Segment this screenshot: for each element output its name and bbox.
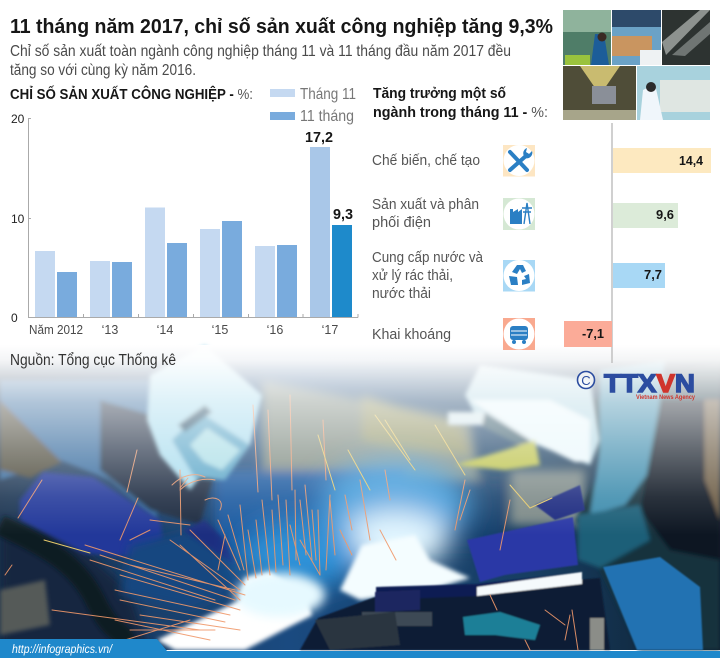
row: Chế biến, chế tạo: Chế biến, chế tạo xyxy=(372,152,480,169)
row: Khai khoáng: Khai khoáng xyxy=(372,326,451,343)
bar chart xyxy=(11,112,358,337)
lower left dark xyxy=(0,520,150,650)
source: Nguồn: Tổng cục Thống kê xyxy=(10,352,176,369)
white top fade xyxy=(0,345,720,535)
x axis labels: Năm 2012 xyxy=(29,323,83,337)
footer band xyxy=(0,639,720,658)
sector chart heading xyxy=(373,85,548,121)
row: Cung cấp nước và xử lý rác thải, nước thải: Cung cấp nước và xyxy=(372,249,484,266)
row: Sản xuất và phân phối điện: Sản xuất và phân xyxy=(372,196,479,213)
row: Cung cấp nước và xử lý rác thải, nước thải: 7,7 xyxy=(644,267,662,282)
icon: recycle xyxy=(503,260,535,292)
y axis labels: 20 xyxy=(11,112,25,126)
logo: TTXVN: Vietnam News Agency xyxy=(636,394,695,401)
sector axis line xyxy=(611,123,613,363)
photo: welders and sparks xyxy=(0,345,720,650)
bars: 11 tháng xyxy=(57,221,352,317)
hose xyxy=(0,525,125,642)
subtitle: Chỉ số sản xuất toàn ngành công nghiệp tháng 11 và 11 tháng đầu năm 2017 đều xyxy=(10,43,511,60)
row: Cung cấp nước và xử lý rác thải, nước thải xyxy=(372,249,665,302)
right sleeve cloth xyxy=(603,557,703,650)
x axis labels xyxy=(29,323,338,337)
y axis labels: 0 xyxy=(11,311,18,325)
left glove xyxy=(20,472,163,557)
icon: tools xyxy=(503,145,535,176)
row: Chế biến, chế tạo xyxy=(372,145,711,176)
value labels xyxy=(305,129,353,223)
value labels: 9,3 xyxy=(333,206,353,223)
lower machinery xyxy=(300,572,610,650)
right helmet xyxy=(448,365,600,470)
icon: mining cart xyxy=(503,318,535,350)
row: Chế biến, chế tạo: 14,4 xyxy=(679,153,704,168)
machinery backdrop xyxy=(215,380,585,560)
logo: TTXVN: C xyxy=(581,373,591,388)
blue smoke xyxy=(240,460,470,590)
row: Sản xuất và phân phối điện: phối điện xyxy=(372,214,431,231)
sector chart heading: Tăng trưởng một số xyxy=(373,85,506,102)
x axis labels: ‘13 xyxy=(102,323,118,337)
left helmet xyxy=(147,345,262,490)
sparks xyxy=(5,395,578,650)
right glove xyxy=(467,517,578,582)
row: Sản xuất và phân phối điện: 9,6 xyxy=(656,207,674,222)
logo: TTXVN: TTXVN xyxy=(604,370,695,398)
title: 11 tháng năm 2017, chỉ số sản xuất công nghiệp tăng 9,3% xyxy=(10,16,553,38)
legend: 11 tháng xyxy=(300,108,354,125)
x axis labels: ‘15 xyxy=(212,323,228,337)
footer band: http://infographics.vn/ xyxy=(12,644,114,656)
y axis labels xyxy=(11,112,25,325)
logo: TTXVN xyxy=(578,370,695,401)
row: Cung cấp nước và xử lý rác thải, nước thải: nước thải xyxy=(372,285,431,302)
x axis labels: ‘14 xyxy=(157,323,173,337)
right welder body xyxy=(575,360,720,650)
icon: power plant xyxy=(503,198,535,230)
row: Khai khoáng xyxy=(372,318,612,350)
row: Sản xuất và phân phối điện xyxy=(372,196,678,231)
y axis labels: 10 xyxy=(11,212,25,226)
sector chart heading: ngành trong tháng 11 - %: xyxy=(373,104,548,121)
bars: Tháng 11 xyxy=(35,147,330,317)
x axis labels: ‘17 xyxy=(322,323,338,337)
x axis labels: ‘16 xyxy=(267,323,283,337)
weld glare xyxy=(157,535,470,650)
subtitle xyxy=(10,43,511,79)
chart heading: CHỈ SỐ SẢN XUẤT CÔNG NGHIỆP - %: xyxy=(10,85,253,103)
legend: Tháng 11 xyxy=(300,86,356,103)
legend xyxy=(270,86,356,125)
row: Cung cấp nước và xử lý rác thải, nước thải: xử lý rác thải, xyxy=(372,267,453,284)
left welder body xyxy=(0,380,215,525)
axes xyxy=(28,118,358,318)
subtitle: tăng so với cùng kỳ năm 2016. xyxy=(10,62,196,79)
row: Khai khoáng: -7,1 xyxy=(582,326,604,341)
value labels: 17,2 xyxy=(305,129,333,146)
factory photos xyxy=(563,10,710,120)
